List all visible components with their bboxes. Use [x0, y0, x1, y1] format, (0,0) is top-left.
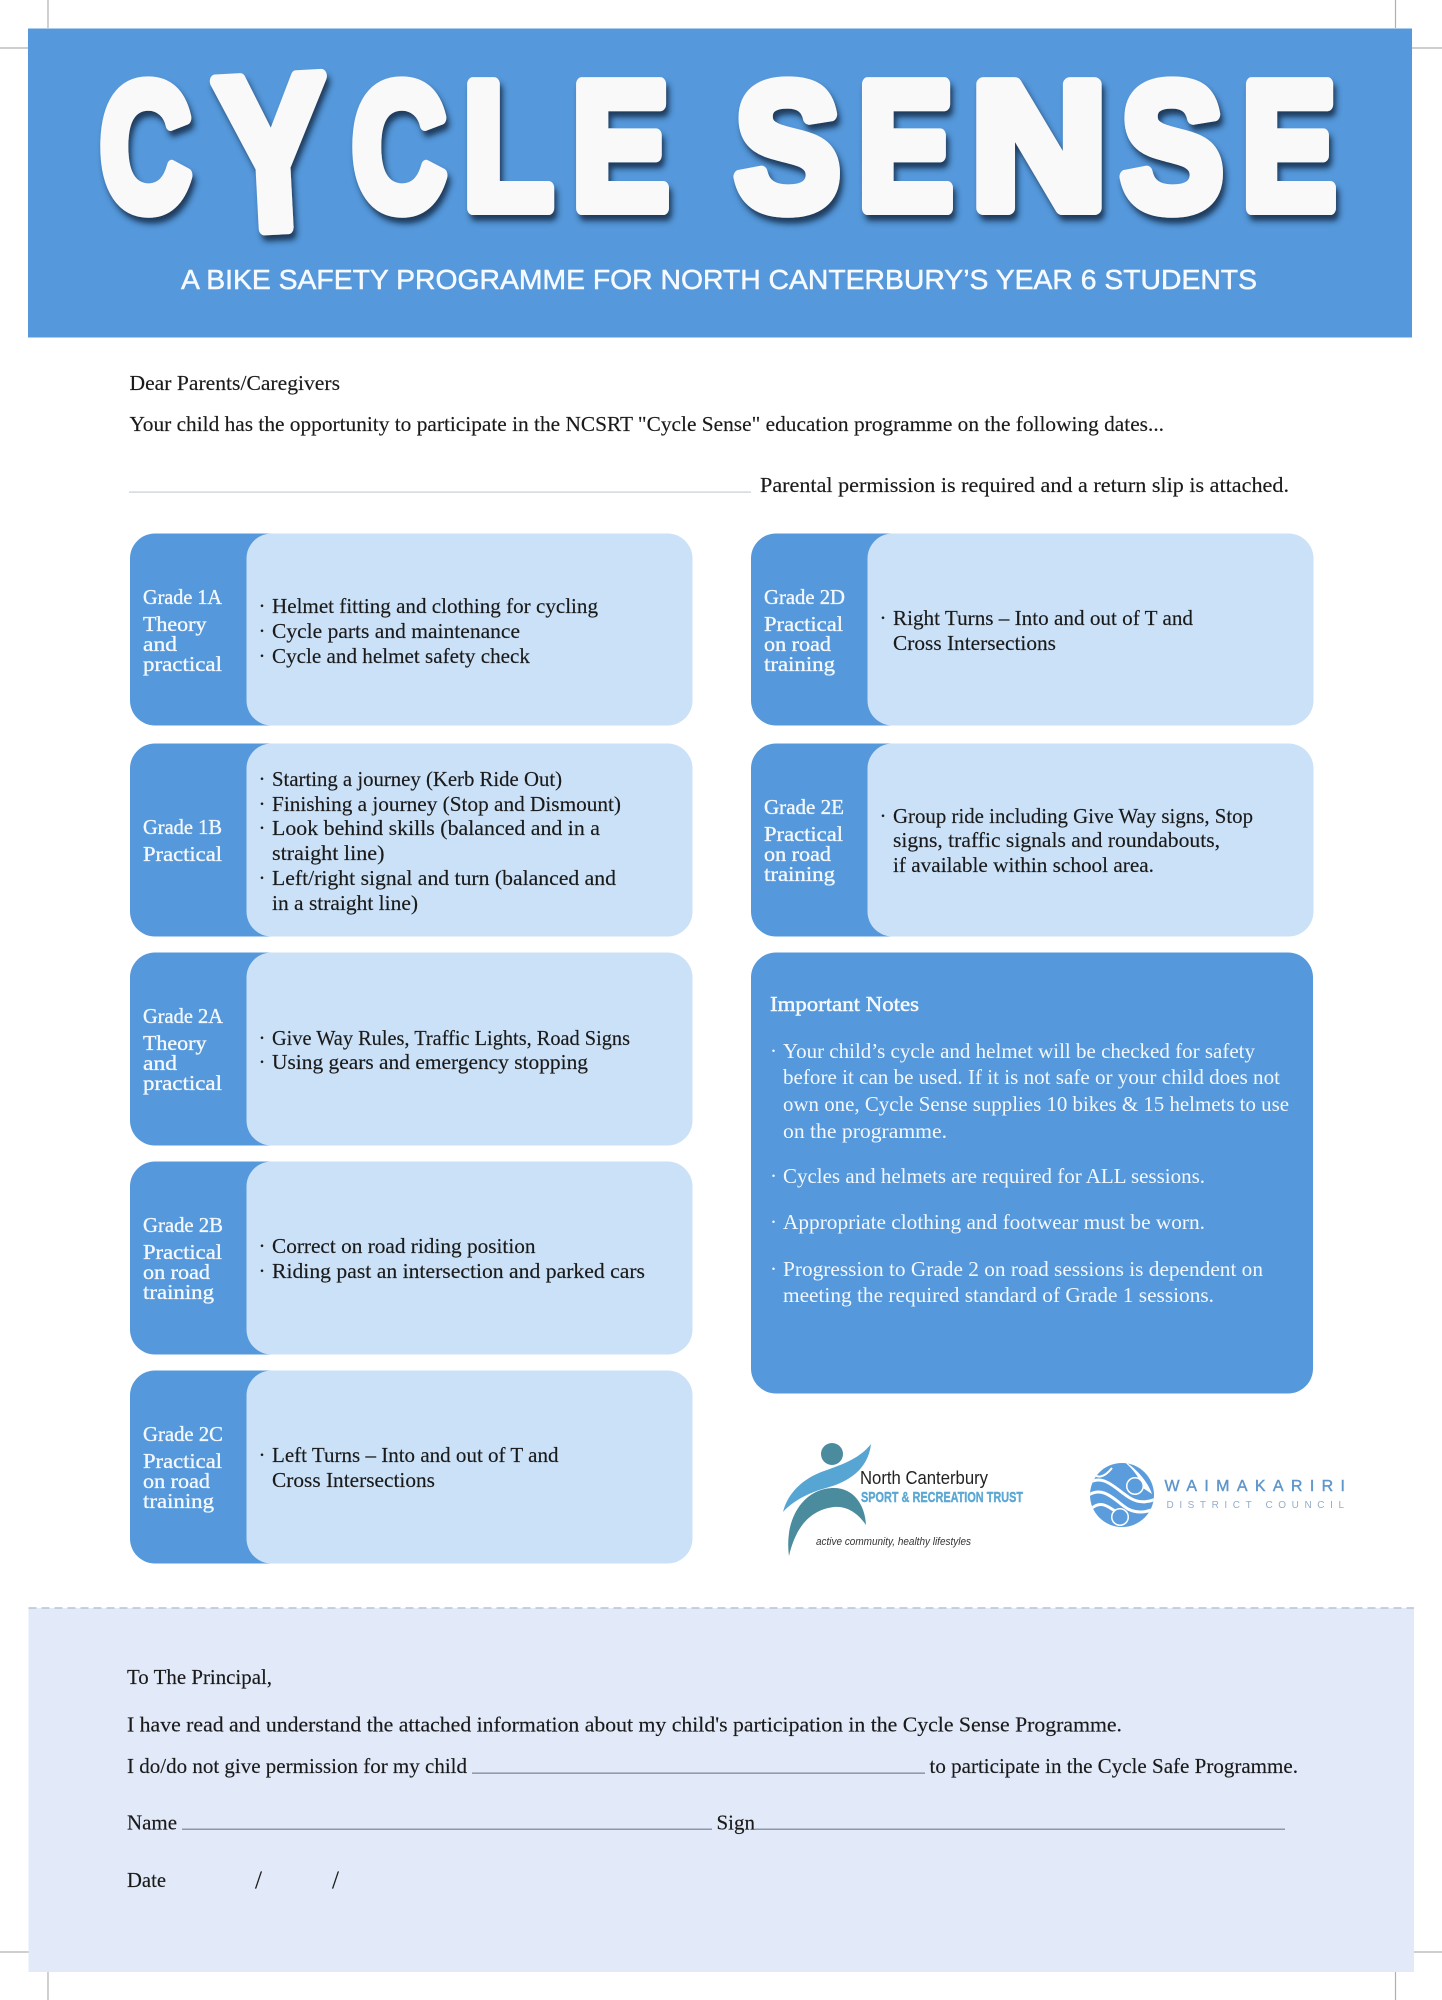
slip: name and sign: Sign	[716, 1810, 755, 1834]
label: Grade 2B: Practical	[143, 1240, 222, 1264]
title: Cycle Sense	[100, 29, 1336, 277]
label: Grade 2C: on road	[143, 1469, 211, 1493]
list: Grade 1B: ·	[258, 866, 266, 890]
list: Grade 1A: ·	[258, 644, 266, 668]
title: Cycle Sense: E	[858, 46, 953, 247]
list: Grade 2D	[880, 606, 1193, 655]
label: Grade 2B: on road	[143, 1260, 211, 1284]
list: Grade 1A: ·	[258, 594, 266, 618]
label: Grade 1B: Practical	[143, 842, 222, 866]
label: Grade 1A	[143, 585, 223, 676]
list: Grade 1B: Finishing a journey (Stop and Dismount)	[272, 792, 621, 816]
list: Grade 2A: Using gears and emergency stopping	[272, 1050, 589, 1074]
title: Cycle Sense: E	[1242, 46, 1336, 247]
notes list: Appropriate clothing and footwear must be worn.	[783, 1210, 1205, 1234]
notes list: meeting the required standard of Grade 1 sessions.	[783, 1283, 1214, 1307]
intro text: Dear Parents/Caregivers	[130, 371, 340, 395]
label: Grade 2E: on road	[764, 842, 832, 866]
list: Grade 2E: signs, traffic signals and roundabouts,	[893, 828, 1220, 852]
list: Grade 1B: straight line)	[272, 841, 384, 865]
slip: date: /	[255, 1867, 262, 1894]
list: Grade 2A: Give Way Rules, Traffic Lights, Road Signs	[272, 1026, 630, 1050]
panel: Grade 1A	[130, 534, 692, 726]
label: Grade 1A: Theory	[143, 612, 207, 636]
notes list: Cycles and helmets are required for ALL sessions.	[783, 1164, 1205, 1188]
label: Grade 2D	[764, 585, 845, 676]
label: Grade 2B	[143, 1213, 223, 1304]
panel: Grade 2E	[751, 744, 1314, 936]
list: Grade 1B: Left/right signal and turn (balanced and	[272, 866, 617, 890]
label: Grade 2C: training	[143, 1489, 215, 1513]
list: Grade 1B: Starting a journey (Kerb Ride Out)	[272, 767, 562, 791]
label: Grade 1A: Grade 1A	[143, 585, 223, 609]
slip: name and sign: Name	[127, 1810, 177, 1834]
slip: salutation: To The Principal,	[127, 1665, 272, 1689]
list: Grade 2A: ·	[258, 1050, 266, 1074]
logo: Waimakariri District Council	[1087, 1460, 1345, 1527]
label: Grade 1A: and	[143, 632, 178, 656]
label: Grade 2E: Grade 2E	[764, 795, 844, 819]
panel: Important Notes	[751, 952, 1313, 1394]
slip: name and sign	[127, 1810, 1285, 1834]
list: Grade 1B: ·	[258, 767, 266, 791]
notes list: ·	[770, 1039, 777, 1063]
label: Grade 2C	[143, 1422, 223, 1513]
title: Cycle Sense: Y	[210, 29, 334, 277]
list: Grade 2A	[258, 1026, 630, 1074]
list: Grade 1B: Look behind skills (balanced and in a	[272, 816, 601, 840]
label: Grade 2B: Grade 2B	[143, 1213, 223, 1237]
list: Grade 1A	[258, 594, 598, 668]
panel: permission slip	[28, 1608, 1414, 1972]
list: Grade 2E: ·	[880, 804, 886, 828]
list: Grade 2E: Group ride including Give Way signs, Stop	[893, 804, 1253, 828]
label: Grade 2A: Theory	[143, 1031, 207, 1055]
label: Grade 2D: on road	[764, 632, 832, 656]
label: Grade 2D: Practical	[764, 612, 843, 636]
notes list: ·	[770, 1164, 777, 1188]
notes list: before it can be used. If it is not safe or your child does not	[783, 1065, 1280, 1089]
label: Grade 2E: Practical	[764, 822, 843, 846]
logo: North Canterbury Sport & Recreation Trust: active community, healthy lifestyles	[816, 1536, 971, 1548]
slip: date: Date	[127, 1868, 166, 1892]
title: Cycle Sense: C	[100, 47, 191, 248]
list: Grade 1B	[258, 767, 621, 915]
list: Grade 2C: Cross Intersections	[272, 1468, 435, 1492]
notes heading: Important Notes	[770, 992, 919, 1016]
logo: Waimakariri District Council: WAIMAKARIRI	[1164, 1478, 1345, 1495]
list: Grade 2B: ·	[258, 1234, 266, 1258]
title: Cycle Sense: L	[463, 46, 553, 247]
label: Grade 2A: and	[143, 1051, 178, 1075]
notes list: ·	[770, 1210, 777, 1234]
header banner	[28, 28, 1412, 338]
logo: North Canterbury Sport & Recreation Trust	[783, 1443, 1023, 1556]
intro text: Parental permission is required and a return slip is attached.	[760, 473, 1289, 497]
logo: North Canterbury Sport & Recreation Trust: North Canterbury	[860, 1468, 988, 1488]
list: Grade 1A: Cycle and helmet safety check	[272, 644, 530, 668]
list: Grade 1B: in a straight line)	[272, 891, 418, 915]
list: Grade 1A: Cycle parts and maintenance	[272, 619, 520, 643]
list: Grade 2D: Right Turns – Into and out of T and	[893, 606, 1193, 630]
list: Grade 2C: ·	[258, 1443, 266, 1467]
label: Grade 2D: training	[764, 652, 836, 676]
label: Grade 2D: Grade 2D	[764, 585, 845, 609]
list: Grade 1A: ·	[258, 619, 266, 643]
list: Grade 1B: ·	[258, 816, 266, 840]
title: Cycle Sense: S	[735, 47, 840, 248]
label: Grade 2A	[143, 1004, 224, 1095]
list: Grade 2B	[258, 1234, 645, 1283]
logo: Waimakariri District Council: DISTRICT COUNCIL	[1166, 1500, 1344, 1511]
slip: permission line	[127, 1754, 1298, 1778]
panel: Grade 2B	[130, 1162, 692, 1354]
title: Cycle Sense: S	[1121, 47, 1223, 248]
notes list: own one, Cycle Sense supplies 10 bikes & 15 helmets to use	[783, 1092, 1289, 1116]
slip: statement: I have read and understand the attached information about my child's participation in the Cycle Sense Programme.	[127, 1712, 1122, 1736]
label: Grade 1A: practical	[143, 652, 222, 676]
notes list	[770, 1039, 1289, 1307]
list: Grade 2D: Cross Intersections	[893, 631, 1056, 655]
list: Grade 2B: Riding past an intersection and parked cars	[272, 1259, 645, 1283]
intro text	[129, 371, 1289, 497]
title: Cycle Sense: E	[572, 46, 669, 247]
list: Grade 2D: ·	[880, 606, 886, 630]
panel: Grade 1B	[130, 744, 692, 936]
panel: Grade 2D	[751, 534, 1314, 726]
slip: date: /	[332, 1867, 339, 1894]
notes list: on the programme.	[783, 1119, 947, 1143]
label: Grade 1B: Grade 1B	[143, 815, 222, 839]
label: Grade 2E	[764, 795, 844, 886]
list: Grade 2C	[258, 1443, 559, 1492]
list: Grade 2E: if available within school area.	[893, 853, 1154, 877]
list: Grade 2B: Correct on road riding position	[272, 1234, 536, 1258]
list: Grade 2A: ·	[258, 1026, 266, 1050]
label: Grade 2E: training	[764, 862, 836, 886]
subtitle: A BIKE SAFETY PROGRAMME FOR NORTH CANTERBURY’S YEAR 6 STUDENTS	[181, 264, 1257, 295]
slip: date	[127, 1867, 339, 1894]
label: Grade 2B: training	[143, 1280, 215, 1304]
notes list: ·	[770, 1257, 777, 1281]
label: Grade 1B	[143, 815, 222, 866]
slip: permission line: I do/do not give permission for my child	[127, 1754, 467, 1778]
logo: North Canterbury Sport & Recreation Trust: SPORT & RECREATION TRUST	[861, 1489, 1023, 1506]
notes list: Your child’s cycle and helmet will be checked for safety	[783, 1039, 1255, 1063]
list: Grade 2B: ·	[258, 1259, 266, 1283]
label: Grade 2A: Grade 2A	[143, 1004, 224, 1028]
intro text: Your child has the opportunity to participate in the NCSRT "Cycle Sense" education programme on the following dates...	[130, 412, 1164, 436]
label: Grade 2A: practical	[143, 1071, 222, 1095]
title: Cycle Sense: N	[971, 46, 1107, 247]
panel: Grade 2A	[130, 952, 692, 1146]
list: Grade 2C: Left Turns – Into and out of T and	[272, 1443, 559, 1467]
label: Grade 2C: Grade 2C	[143, 1422, 223, 1446]
list: Grade 1B: ·	[258, 792, 266, 816]
label: Grade 2C: Practical	[143, 1449, 222, 1473]
list: Grade 2E	[880, 804, 1253, 877]
title: Cycle Sense: C	[352, 47, 446, 248]
slip: permission line: to participate in the Cycle Safe Programme.	[930, 1754, 1298, 1778]
notes list: Progression to Grade 2 on road sessions is dependent on	[783, 1257, 1264, 1281]
list: Grade 1A: Helmet fitting and clothing for cycling	[272, 594, 598, 618]
panel: Grade 2C	[130, 1370, 692, 1564]
